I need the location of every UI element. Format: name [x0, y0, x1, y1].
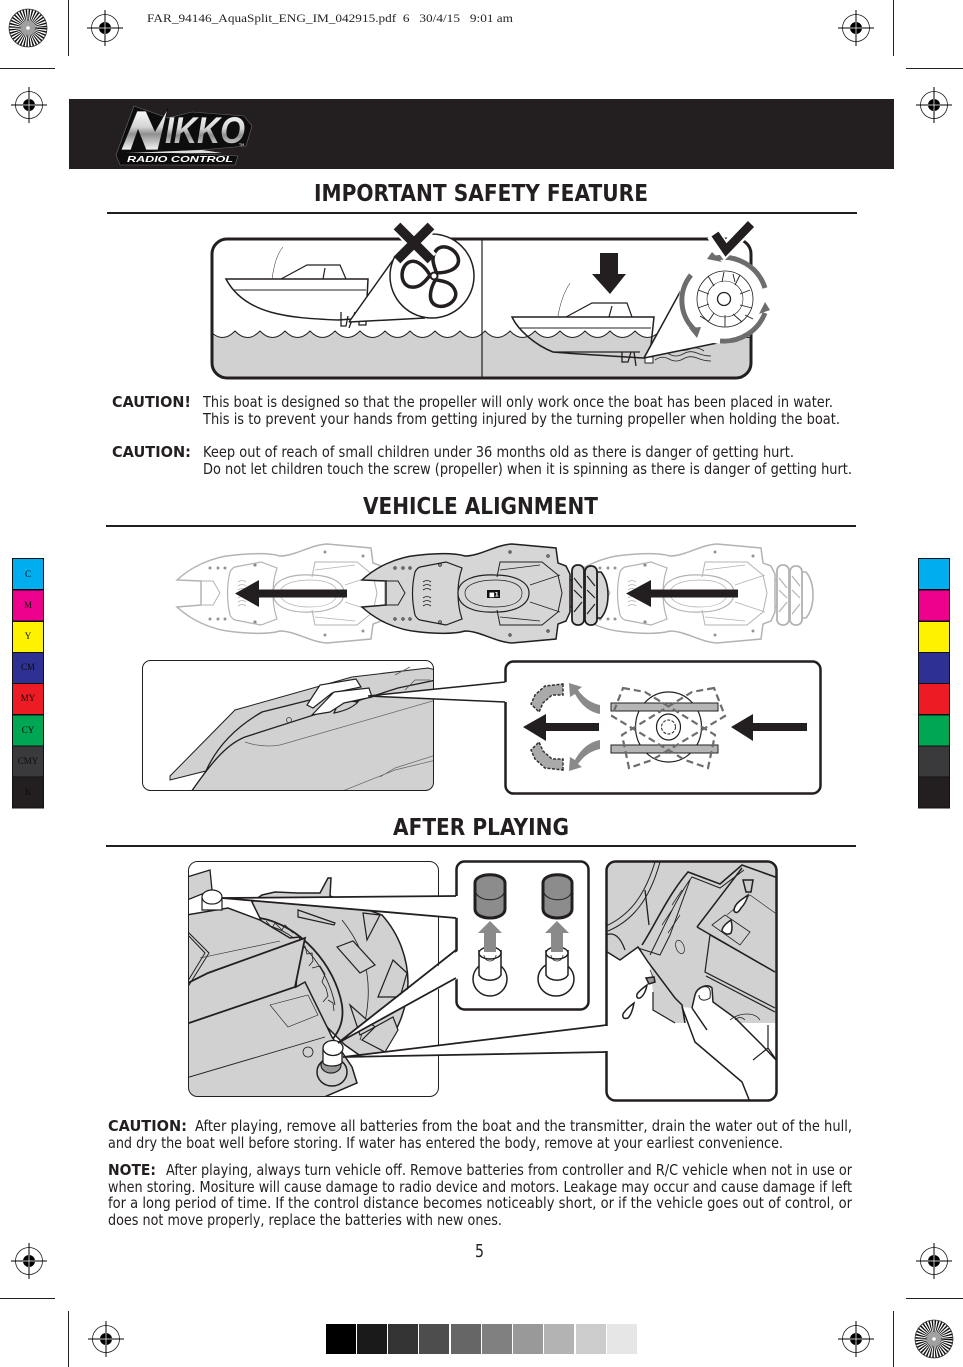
caution text two: [112, 443, 852, 478]
arrow: left ghost: [235, 580, 347, 607]
crop line vertical top left: [0, 0, 963, 68]
caution text one: This boat is designed so that the propeller will only work once the boat has been placed in water.: [202, 393, 833, 411]
arrows: pull plugs up: [478, 921, 569, 952]
icon: registration mark bottom: [11, 1243, 952, 1357]
panel: draining water by hand: [604, 860, 778, 1102]
colour bar left labels: Y: [25, 631, 32, 641]
right boat lines: [512, 283, 654, 366]
magnifier: still propeller: [349, 234, 474, 322]
colour bar left: [12, 558, 44, 808]
colour bar left labels: CY: [22, 725, 35, 735]
page number: 5: [475, 1241, 484, 1262]
colour bar right: [918, 558, 950, 808]
note text: does not move properly, replace the batteries with new ones.: [108, 1211, 502, 1229]
water: [210, 331, 760, 378]
pointer wedge: [368, 682, 508, 702]
hull body: [186, 870, 357, 1098]
rudder fin: [307, 679, 372, 715]
left boat out of water: [226, 247, 368, 328]
ghost vehicle left: [177, 544, 423, 643]
colour bar left labels: CM: [21, 662, 35, 672]
right boat hull: [512, 317, 654, 358]
panel: drain plugs removed: [456, 862, 588, 1010]
rudder top view: [611, 688, 725, 768]
illustration: vehicle drifting left: [177, 544, 813, 643]
grey hull: [604, 860, 778, 1023]
icon: registration mark top: [11, 10, 952, 123]
colour bar left labels: MY: [21, 693, 36, 703]
icon: colour target bottom right: [915, 1320, 953, 1358]
drain posts: [473, 947, 574, 996]
icon: check mark: [713, 223, 752, 250]
file slug text: FAR_94146_AquaSplit_ENG_IM_042915.pdf 6 30/4/15 9:01 am: [147, 11, 514, 25]
colour bar left labels: CMY: [18, 756, 39, 766]
lower drain post: [317, 1040, 347, 1086]
colour bar left labels: C: [25, 569, 31, 579]
caution text three: After playing, remove all batteries from the boat and the transmitter, drain the water out of the hull,: [195, 1117, 852, 1135]
pointers from boat to detail panels: [222, 896, 609, 1057]
logo: Nikko Radio Control: TM: [238, 143, 244, 147]
logo: Nikko Radio Control: RADIO CONTROL: [127, 154, 233, 164]
caution text two: CAUTION:: [112, 443, 191, 461]
studs and water drops: [623, 880, 753, 1018]
caution text one: This is to prevent your hands from getting injured by the turning propeller when holding the boat.: [202, 410, 840, 428]
caution text three: and dry the boat well before storing. If water has entered the body, remove at your earliest convenience.: [108, 1134, 783, 1152]
header band: [69, 99, 894, 169]
heading: vehicle alignment: VEHICLE ALIGNMENT: [363, 494, 598, 520]
caution text two: Do not let children touch the screw (propeller) when it is spinning as there is danger of getting hurt.: [203, 460, 852, 478]
white hand fill: [683, 986, 739, 1023]
panel: hull underside with rudder: [142, 660, 436, 792]
printer marks: bottom: [0, 1243, 963, 1367]
colour bar left labels: [18, 569, 39, 797]
magnifier: spinning propeller: [644, 252, 770, 358]
arrow: input right: [731, 714, 807, 741]
hand: [682, 986, 776, 1102]
panel frame: [212, 239, 751, 378]
centre vehicle: ■1: [489, 592, 499, 598]
drain plug pair: [475, 875, 572, 918]
arrow: boat placed down: [592, 253, 626, 294]
panel: boat rear with drain plugs: [186, 862, 438, 1098]
wake ripples: [655, 348, 711, 361]
note text: NOTE:: [108, 1161, 156, 1179]
curved arrows: [569, 683, 600, 771]
heading: after playing: AFTER PLAYING: [393, 815, 569, 841]
caution text one: [112, 393, 840, 428]
icon: cross mark: [397, 225, 431, 259]
crop line bottom: [0, 1298, 963, 1367]
greyscale strip: [326, 1324, 637, 1354]
colour bar left labels: K: [25, 787, 32, 797]
propeller wheel: [252, 878, 408, 1057]
printer marks: top: [0, 0, 963, 123]
ghost vehicle right: [567, 544, 813, 643]
icon: colour target top left: [9, 9, 47, 47]
centre vehicle: [362, 544, 608, 643]
arrow: right ghost: [626, 580, 738, 607]
caution text three: [108, 1117, 852, 1152]
illustration: boat out of water and in water: [210, 223, 770, 378]
note text: for a long period of time. If the control distance becomes noticeably short, or if the vehicle goes out of control, or: [108, 1194, 853, 1212]
colour bar left labels: M: [24, 600, 32, 610]
arrow: input left: [523, 714, 599, 741]
dashed rudder outlines: [531, 684, 563, 770]
caution text three: CAUTION:: [108, 1117, 187, 1135]
caution text one: CAUTION!: [112, 393, 191, 411]
logo: Nikko Radio Control: IKKO: [165, 110, 245, 151]
top drain post: [202, 890, 222, 910]
logo: Nikko Radio Control: [116, 106, 252, 165]
panel: rudder trim diagram: [368, 662, 820, 794]
note text: [108, 1161, 853, 1229]
caution text two: Keep out of reach of small children under 36 months old as there is danger of getting hurt.: [203, 443, 794, 461]
heading: important safety feature: IMPORTANT SAFETY FEATURE: [314, 181, 648, 207]
